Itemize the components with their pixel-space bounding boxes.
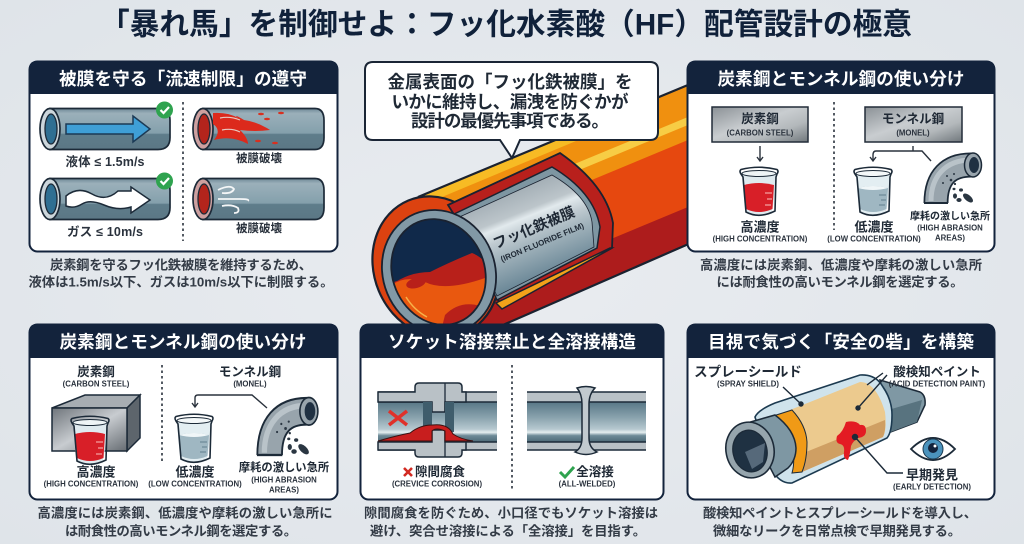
- elbow: high abrasion: [257, 398, 318, 456]
- label: spray shield: スプレーシールド: [694, 364, 802, 380]
- right pipe end: [880, 380, 925, 433]
- text: material note bottom: 高濃度には炭素鋼、低濃度や摩耗の激しい急所に: [38, 504, 332, 520]
- callout: key message: [365, 62, 658, 158]
- text: safety note: [703, 504, 977, 538]
- label: low concentration: 低濃度: [175, 464, 215, 480]
- callout: key message: 金属表面の「フッ化鉄被膜」を: [388, 72, 632, 92]
- panel: socket weld ban: [360, 324, 664, 500]
- beaker: high concentration: [740, 167, 778, 215]
- label: low concentration: [827, 220, 921, 244]
- label: high concentration: [44, 464, 139, 488]
- label: carbon steel: (CARBON STEEL): [63, 380, 130, 388]
- label: high abrasion: [239, 460, 329, 494]
- shielded pipe illustration: [721, 375, 925, 483]
- text: flow velocity note: 炭素鋼を守るフッ化鉄被膜を維持するため、: [50, 256, 312, 272]
- label: low concentration: (LOW CONCENTRATION): [148, 480, 242, 488]
- arrow: monel connector: [192, 395, 267, 408]
- header: flow velocity: [29, 61, 338, 94]
- text: flow velocity note: 液体は1.5m/s以下、ガスは10m/s以下に制限する。: [28, 274, 334, 290]
- red leak: [836, 421, 866, 460]
- full weld section: [527, 386, 646, 454]
- panel: safety fortress: [687, 324, 995, 500]
- iron fluoride film: [450, 167, 600, 300]
- header: socket weld: [360, 324, 664, 358]
- panel: material selection (top): [687, 61, 995, 252]
- film label: フッ化鉄被膜: [490, 202, 578, 253]
- box: carbon steel: (CARBON STEEL): [727, 128, 794, 138]
- label: early detection: 早期発見: [906, 468, 958, 482]
- elbow: high abrasion: [924, 153, 982, 204]
- pipe mouth: [721, 418, 779, 482]
- pipe: liquid film damage: [193, 108, 324, 150]
- divider: [511, 365, 513, 490]
- label: crevice corrosion: [392, 464, 482, 488]
- label: all welded: 全溶接: [576, 464, 614, 479]
- outer pipe mouth: [351, 177, 521, 357]
- label: high abrasion: AREAS): [269, 486, 299, 494]
- leader lines: [783, 373, 903, 473]
- label: high abrasion: AREAS): [935, 234, 965, 242]
- text: material note top: [700, 256, 982, 290]
- film label: (IRON FLUORIDE FILM): [499, 221, 586, 264]
- text: material note bottom: は耐食性の高いモンネル鋼を選定する。: [65, 522, 297, 538]
- header: material selection: [687, 61, 995, 94]
- label: film damage 1: 被膜破壊: [236, 151, 282, 165]
- label: spray shield: (SPRAY SHIELD): [717, 380, 779, 388]
- text: socket weld note: [364, 504, 658, 538]
- beaker: low concentration: [854, 167, 892, 215]
- inner grey ring: [363, 192, 515, 352]
- header: material selection: 炭素鋼とモンネル鋼の使い分け: [718, 69, 964, 89]
- box: carbon steel: 炭素鋼: [741, 111, 779, 126]
- label: high abrasion: 摩耗の激しい急所: [910, 210, 990, 222]
- text: safety note: 微細なリークを日常点検で早期発見する。: [713, 522, 961, 538]
- label: crevice corrosion: (CREVICE CORROSION): [392, 480, 482, 488]
- label: high concentration: 高濃度: [740, 220, 780, 234]
- left pipe: [747, 415, 796, 477]
- title: 「暴れ馬」を制御せよ：フッ化水素酸（HF）配管設計の極意: [100, 8, 912, 42]
- label: carbon steel: 炭素鋼: [77, 364, 115, 379]
- label: monel: モンネル鋼: [219, 364, 281, 379]
- divider: [182, 102, 184, 241]
- header: material selection: 炭素鋼とモンネル鋼の使い分け: [60, 332, 306, 352]
- label: high abrasion: (HIGH ABRASION: [917, 224, 983, 232]
- box: carbon steel: [712, 107, 808, 142]
- socket weld section: [378, 383, 497, 457]
- label: high abrasion: 摩耗の激しい急所: [239, 460, 329, 474]
- panel: material selection (bottom): [29, 324, 338, 500]
- pipe: gas film damage: [193, 178, 324, 220]
- pipe: liquid OK: [40, 102, 173, 150]
- label: early detection: [893, 468, 971, 492]
- text: safety note: 酸検知ペイントとスプレーシールドを導入し、: [703, 504, 977, 520]
- central illustration: cutaway HF pipe: [371, 84, 687, 324]
- cut edge: [448, 153, 613, 308]
- label: early detection: (EARLY DETECTION): [893, 482, 971, 492]
- label: acid detection paint: 酸検知ペイント: [893, 364, 981, 379]
- text: socket weld note: 避け、突合せ溶接による「全溶接」を目指す。: [370, 522, 646, 538]
- pipe body: [424, 86, 686, 324]
- text: material note top: 高濃度には炭素鋼、低濃度や摩耗の激しい急所: [700, 256, 982, 272]
- header: flow velocity: 被膜を守る「流速制限」の遵守: [59, 69, 307, 89]
- divider: [833, 102, 835, 230]
- header: safety: 目視で気づく「安全の砦」を構築: [708, 332, 974, 352]
- label: all welded: [559, 464, 616, 488]
- beaker: low concentration: [175, 414, 213, 462]
- text: material note bottom: [38, 504, 332, 538]
- text: flow velocity note: [28, 256, 334, 290]
- label: high abrasion: (HIGH ABRASION: [251, 476, 317, 484]
- label: crevice corrosion: 隙間腐食: [415, 464, 465, 479]
- steel block: [52, 395, 140, 451]
- label: low concentration: [148, 464, 242, 488]
- orange band: [770, 410, 807, 473]
- label: high concentration: [713, 220, 808, 244]
- text: material note top: には耐食性の高いモンネル鋼を選定する。: [716, 274, 964, 290]
- label: high concentration: 高濃度: [76, 464, 116, 480]
- film label: [490, 201, 586, 264]
- label: liquid velocity: 液体 ≤ 1.5m/s: [66, 154, 145, 169]
- arrow: carbon steel to beaker: [757, 146, 763, 161]
- shield: outer translucent body: [755, 375, 892, 483]
- shield: gold paint: [790, 382, 886, 472]
- label: monel: [219, 364, 281, 388]
- lower yellow cut band: [496, 248, 612, 309]
- label: high concentration: (HIGH CONCENTRATION): [713, 234, 808, 244]
- panel: flow velocity limits: [29, 61, 338, 252]
- label: low concentration: (LOW CONCENTRATION): [827, 234, 921, 244]
- box: monel: [865, 107, 962, 142]
- header: safety: [687, 324, 995, 358]
- callout: key message: いかに維持し、漏洩を防ぐかが: [392, 92, 629, 112]
- label: acid detection paint: (ACID DETECTION PAINT): [889, 380, 986, 388]
- box: monel: (MONEL): [896, 128, 930, 138]
- icon: eye: [911, 438, 955, 460]
- pipe interior with liquid: [392, 220, 485, 324]
- label: film damage 2: 被膜破壊: [236, 221, 282, 235]
- label: acid detection paint: [889, 364, 986, 388]
- label: high abrasion: [910, 210, 990, 242]
- arrow: monel connectors: [870, 146, 931, 161]
- label: low concentration: 低濃度: [854, 220, 894, 234]
- callout: key message: 設計の最優先事項である。: [411, 111, 609, 131]
- label: high concentration: (HIGH CONCENTRATION): [44, 480, 139, 488]
- label: carbon steel: [63, 364, 130, 388]
- header: material selection: [29, 324, 338, 358]
- divider: [161, 365, 163, 462]
- text: socket weld note: 隙間腐食を防ぐため、小口径でもソケット溶接は: [364, 504, 658, 520]
- label: all welded: (ALL-WELDED): [559, 480, 616, 488]
- label: gas velocity: ガス ≤ 10m/s: [67, 224, 143, 239]
- beaker: high concentration: [71, 416, 109, 464]
- label: spray shield: [694, 364, 802, 388]
- shield: lower paint band: [802, 420, 885, 472]
- pipe: gas OK: [40, 172, 173, 220]
- box: monel: モンネル鋼: [882, 111, 944, 126]
- label: monel: (MONEL): [233, 380, 267, 388]
- header: socket weld: ソケット溶接禁止と全溶接構造: [388, 332, 636, 352]
